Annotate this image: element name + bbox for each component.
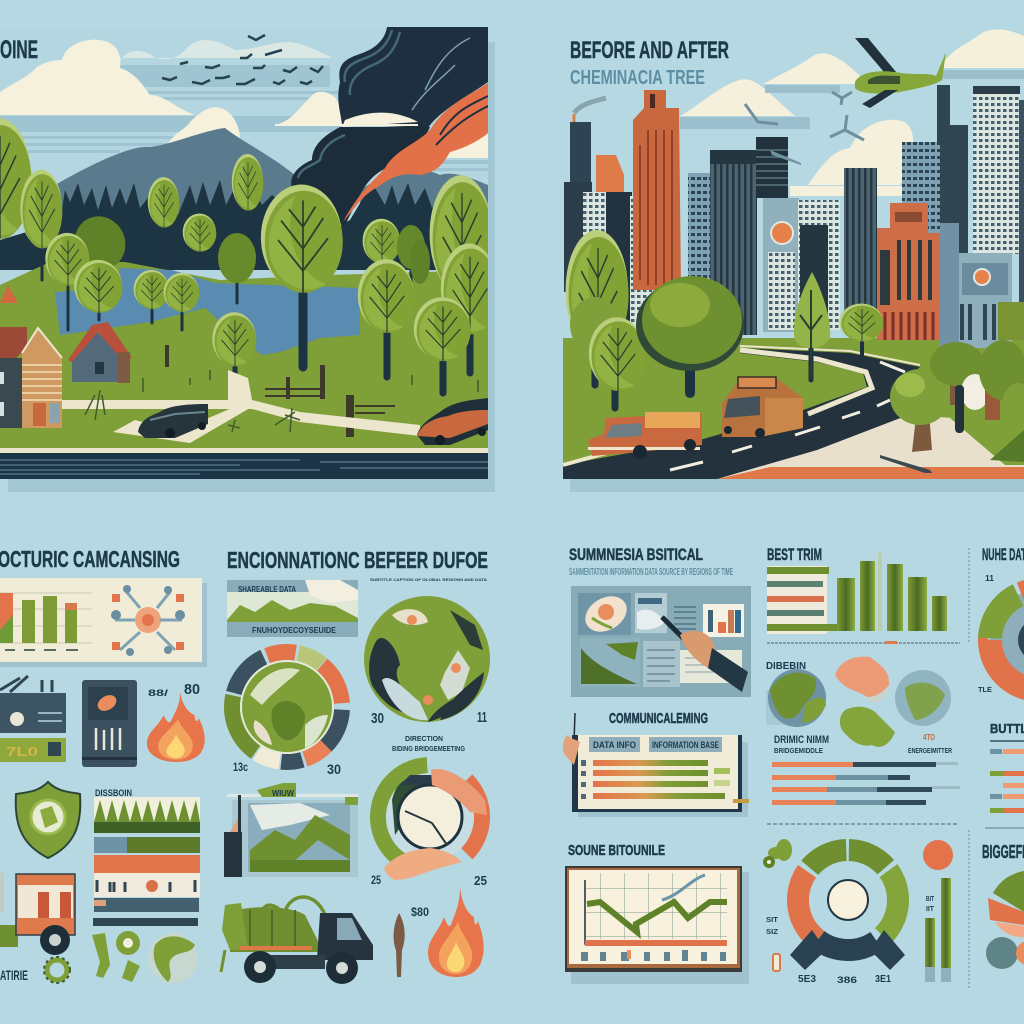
panel: line chart: [565, 866, 749, 984]
globe: right: [895, 670, 951, 726]
clouds: [0, 40, 488, 158]
dark forest: [0, 180, 436, 270]
blue tower: [902, 85, 968, 287]
small distant clouds: [120, 40, 333, 62]
chart: two columns: [925, 878, 951, 982]
small label: donut side: TLE: [978, 687, 992, 694]
trees: forest: [0, 118, 498, 393]
icon: garbage truck: [221, 897, 373, 984]
label: bottom three: 3E1: [875, 974, 891, 985]
small label: 11: [985, 574, 995, 583]
panel: notebook bar chart: DATA INFO: [593, 740, 636, 750]
panel: notebook bar chart: INFORMATION BASE: [652, 740, 719, 750]
grey block: [688, 173, 715, 278]
label: orange stat: 4TO: [923, 733, 935, 742]
paths: [62, 370, 420, 436]
orange strip: [717, 467, 1024, 479]
stat: 13c: 13c: [233, 760, 248, 774]
tower chimney: [570, 122, 591, 200]
heading: source: SOUNE BITOUNILE: [568, 842, 665, 859]
panel: bar chart card: [0, 578, 207, 667]
donut: globe ring: [209, 629, 365, 785]
stat: 30: 30: [327, 761, 341, 777]
stat: $80: $80: [411, 905, 429, 919]
icon: machine: [0, 676, 66, 762]
sky bands: [0, 65, 488, 171]
orange block: [877, 203, 940, 340]
hand: top: [431, 769, 487, 815]
delivery truck: [722, 377, 803, 438]
text: SAMMENTATION INFORMATION DATA SOURCE BY REGIONS OF TIME: [569, 567, 733, 578]
title: before and after: BEFORE AND AFTER: [570, 37, 729, 64]
car: orange: [417, 398, 488, 445]
road: [563, 346, 920, 479]
label: left of donut: SIT: [766, 917, 779, 924]
white tower: [973, 86, 1020, 254]
donut: right: [975, 575, 1024, 705]
foreground paving: [717, 415, 1024, 479]
mountain right: [360, 172, 488, 208]
label: columns: BIT: [926, 896, 935, 903]
footer note: bars: [767, 641, 960, 644]
birds: [745, 92, 864, 140]
car: dark: [138, 404, 208, 438]
label: columns two: IIT: [926, 906, 935, 913]
chart: horizontal bars: [772, 762, 960, 805]
icon: machine: 7L0: [6, 744, 38, 759]
birds: [162, 35, 323, 84]
divider scale: [968, 548, 970, 990]
grid block: [583, 192, 607, 252]
clouds: [680, 29, 1024, 185]
stat left of clock: 25: [371, 873, 381, 887]
icon: flame two: [428, 887, 484, 977]
label: bottom two: 386: [837, 975, 857, 985]
chart: pie: [986, 871, 1024, 969]
stat: 11: 11: [477, 709, 487, 726]
van: [588, 412, 702, 459]
icon: green pieces: [92, 931, 140, 982]
heading: summary: SUMMNESIA BSITICAL: [569, 545, 703, 564]
label: footer: ATIRIE: [0, 967, 28, 983]
stat: 30: 30: [371, 710, 384, 727]
icon: control device: [82, 680, 137, 767]
small caption: SUBTITLE CAPTION OF GLOBAL REGIONS AND DATA: [370, 577, 487, 582]
orange circle: [923, 840, 953, 870]
icon: salmon shape: [835, 657, 889, 703]
panel: landscape card: [227, 580, 358, 637]
donut: bottom centre: [778, 830, 918, 970]
panel: before scene: [0, 27, 498, 479]
globe: left: [766, 669, 826, 727]
hand: bottom: [384, 848, 462, 880]
trees: city: [566, 230, 883, 408]
panel: after scene: [563, 29, 1024, 492]
icon: gear: [44, 957, 70, 983]
icon: network diagram: [111, 585, 185, 656]
panel shadow: before: [8, 42, 495, 492]
panel: presentation board: [571, 586, 751, 697]
heading: left section: OCTURIC CAMCANSING: [0, 546, 180, 572]
paving detail: [880, 455, 932, 473]
icon: spear: [394, 913, 405, 977]
footer note: horizontal bars: [767, 823, 958, 825]
chart: clock ring with hands: [356, 743, 504, 891]
icon: small globe: [148, 933, 198, 983]
label on flag: WIUW: [272, 789, 294, 798]
foreground grass: [950, 412, 1024, 465]
river strip: [0, 448, 488, 479]
icon: truck: [0, 873, 75, 955]
smoke plume: [275, 27, 488, 225]
clock tower: [763, 198, 799, 332]
label: bottom one: 5E3: [798, 974, 816, 985]
stat: 80: 80: [184, 681, 200, 698]
airplane: [855, 38, 946, 108]
ground: [563, 338, 1024, 479]
caption: middle right: DIRECTION: [405, 736, 443, 743]
panel: landscape card: SHAREABLE DATA: [238, 585, 296, 594]
stat right of clock: 25: [474, 873, 487, 888]
tent: [0, 285, 18, 303]
label: sub dring: BRIDGEMIDDLE: [774, 748, 823, 755]
panel: forest stats: DISSBOIN: [95, 788, 132, 798]
bushes: [85, 370, 478, 432]
icon: flame: [147, 692, 205, 762]
side block: [940, 223, 959, 348]
stat label: 88/: [148, 688, 169, 698]
lake: [55, 268, 360, 355]
heading: communication: COMMUNICALEMING: [609, 710, 708, 727]
fence and stumps: [165, 345, 395, 437]
driveway: [113, 408, 250, 443]
skyline: [564, 85, 1024, 348]
mountain: [57, 128, 294, 215]
icon: leaves: [763, 839, 792, 868]
chart: right bars: [985, 740, 1024, 829]
label: right stat: ENERGEIMITTER: [908, 748, 952, 755]
label: left of donut two: SIZ: [766, 929, 779, 936]
heading: middle section: ENCIONNATIONC BEFEER DUFOE: [227, 547, 488, 573]
striped tower: [844, 168, 877, 318]
orange tower: [633, 90, 681, 290]
panel: landscape card: FNUHOYDECOYSEUIDE: [252, 626, 337, 635]
subtitle: after: CHEMINACIA TREE: [570, 67, 705, 89]
panel: forest stats: [93, 788, 200, 926]
caption: middle right line two: BIDING BRIDGEMEETING: [392, 746, 465, 753]
chart: globe: [364, 596, 490, 722]
house: wooden: [0, 327, 62, 428]
icon: shield: [16, 782, 80, 858]
title: before: OINE: [0, 36, 38, 64]
ground: [0, 262, 488, 448]
heading: best trim: BEST TRIM: [767, 545, 822, 564]
panel: notebook bar chart: [563, 713, 749, 817]
trees: foreground: [890, 340, 1024, 462]
heading: diagrams: DIBEBIN: [766, 661, 806, 672]
chart: bars: [767, 553, 947, 634]
icon: green shape: [840, 707, 895, 747]
hand with pen: [662, 617, 690, 645]
house: cabin: [68, 322, 132, 383]
icon: orange tag: [773, 954, 780, 971]
label: dring: DRIMIC NIMM: [774, 734, 829, 746]
sky bands: [680, 70, 1024, 196]
panel: map on stand: [224, 783, 358, 877]
